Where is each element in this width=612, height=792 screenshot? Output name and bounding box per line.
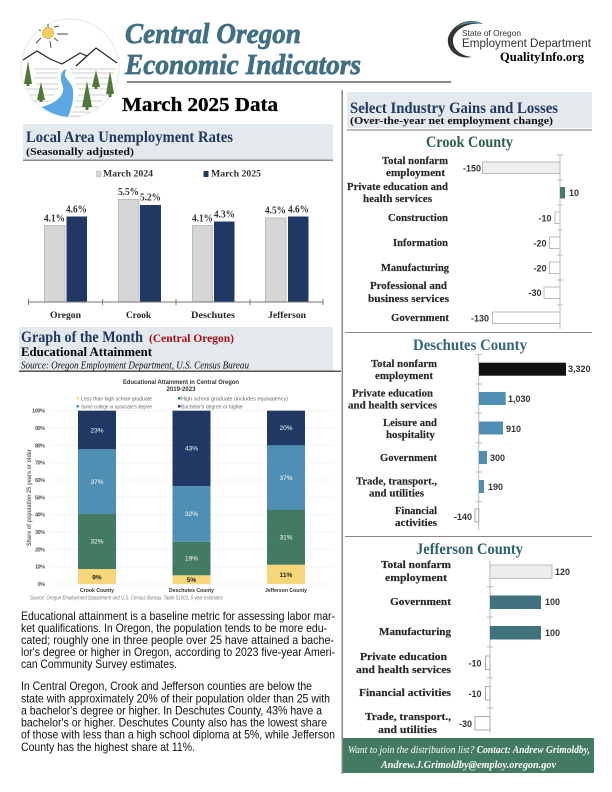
panel: Jefferson County bbox=[356, 541, 570, 736]
Jefferson County bar chart: Manufacturing bbox=[379, 627, 452, 638]
unemployment legend: March 2025 bbox=[211, 170, 261, 180]
chart title bbox=[123, 380, 239, 393]
panel: Crook County bbox=[347, 134, 579, 329]
text block: second paragraph: bachelor's or higher. Deschutes County also has the lowest share bbox=[21, 716, 327, 730]
Deschutes County bar chart: 3,320 bbox=[568, 364, 591, 374]
callout: distribution list contact: Andrew.J.Grimoldby@employ.oregon.gov bbox=[380, 760, 556, 771]
Crook County bar chart: Private education and bbox=[347, 182, 448, 193]
text block: second paragraph: a bachelor's degree or higher. In Deschutes County, 43% have a bbox=[21, 704, 322, 718]
panel: select industry heading bbox=[347, 92, 592, 130]
category labels: Jefferson County bbox=[265, 588, 308, 594]
logo: State of Oregon Employment Department bbox=[448, 21, 592, 64]
Jefferson County heading: Jefferson County bbox=[416, 541, 523, 558]
panel: select industry heading: Select Industry Gains and Losses bbox=[350, 100, 558, 117]
date heading: March 2025 Data bbox=[122, 94, 278, 116]
bar chart: unemployment rates: Jefferson bbox=[268, 311, 307, 321]
Deschutes County bar chart: and utilities bbox=[369, 488, 424, 500]
Deschutes County bar chart: Private education bbox=[352, 388, 433, 400]
bar chart: unemployment rates: 4.6% bbox=[288, 204, 309, 216]
Crook County bar chart: Government bbox=[391, 313, 450, 324]
bars: Crook County bbox=[78, 411, 116, 584]
category labels: Crook County bbox=[80, 588, 115, 594]
bars: Jefferson County bbox=[267, 411, 305, 584]
Crook County bar chart: -20 bbox=[533, 264, 546, 274]
title: Economic Indicators bbox=[124, 50, 361, 81]
Jefferson County bar chart bbox=[356, 560, 570, 736]
text block: first paragraph: can Community Survey estimates. bbox=[21, 657, 177, 671]
graph of the month heading: Source: Oregon Employment Department, U.S. Census Bureau bbox=[21, 360, 249, 372]
chart legend: High school graduate (includes equivalency) bbox=[181, 396, 288, 402]
Crook County bar chart: Professional and bbox=[370, 281, 447, 292]
Crook County bar chart: employment bbox=[386, 168, 446, 179]
bar chart: unemployment rates: 4.5% bbox=[265, 204, 286, 216]
panel: Deschutes County bbox=[348, 337, 591, 530]
y axis labels: 60% bbox=[35, 478, 45, 484]
text block: first paragraph: lor's degree or higher in Oregon, according to 2023 five-year Ameri- bbox=[21, 645, 335, 659]
Deschutes County bar chart: Government bbox=[380, 453, 437, 464]
bar chart: unemployment rates: Oregon bbox=[50, 311, 82, 321]
y axis labels: 40% bbox=[35, 513, 45, 519]
graph of the month heading bbox=[19, 327, 341, 372]
y axis labels: 90% bbox=[35, 426, 45, 432]
logo: Central Oregon landscape bbox=[21, 19, 119, 117]
bar chart: unemployment rates bbox=[28, 186, 323, 321]
Crook County bar chart: Construction bbox=[388, 213, 448, 224]
Crook County bar chart: Information bbox=[393, 238, 448, 249]
Crook County bar chart: business services bbox=[368, 294, 449, 305]
Jefferson County bar chart: and health services bbox=[356, 665, 451, 676]
Deschutes County bar chart: -140 bbox=[454, 512, 472, 522]
text block: second paragraph: In Central Oregon, Crook and Jefferson counties are below the bbox=[21, 679, 312, 693]
unemployment legend: March 2024 bbox=[103, 170, 153, 180]
y axis labels: 80% bbox=[35, 443, 45, 449]
bars: Deschutes County: 32% bbox=[185, 511, 198, 518]
Crook County bar chart: -20 bbox=[533, 238, 546, 248]
Deschutes County bar chart: activities bbox=[395, 518, 437, 529]
unemployment legend bbox=[96, 170, 261, 180]
text block: second paragraph: of those with less than a high school diploma at 5%, while Jefferson bbox=[21, 728, 335, 742]
bar chart: unemployment rates: Crook bbox=[126, 311, 152, 321]
Crook County bar chart: -130 bbox=[471, 314, 489, 324]
bars: Deschutes County: 5% bbox=[187, 577, 196, 584]
bars: Deschutes County: 43% bbox=[185, 446, 198, 453]
Deschutes County bar chart: Financial bbox=[395, 506, 437, 517]
bars: Jefferson County: 31% bbox=[279, 534, 293, 542]
column divider bbox=[342, 90, 343, 774]
chart title: 2019-2023 bbox=[166, 387, 196, 393]
y axis labels: Share of population 25 years or older bbox=[27, 448, 33, 546]
Jefferson County bar chart: Government bbox=[390, 597, 452, 608]
bar chart: unemployment rates: 4.1% bbox=[192, 212, 213, 224]
Crook County bar chart bbox=[347, 154, 579, 329]
bars: Crook County: 37% bbox=[90, 479, 104, 486]
Deschutes County bar chart: employment bbox=[375, 371, 434, 382]
panel: graph of the month bbox=[19, 327, 341, 754]
Crook County bar chart: -10 bbox=[538, 214, 552, 224]
text block: second paragraph: County has the highest share at 11%. bbox=[21, 740, 195, 754]
Deschutes County bar chart: 300 bbox=[490, 453, 505, 463]
y axis labels: 70% bbox=[35, 461, 45, 467]
unemployment heading: (Seasonally adjusted) bbox=[26, 146, 134, 158]
text block: second paragraph bbox=[21, 679, 335, 754]
category labels bbox=[80, 588, 308, 594]
bars: Crook County: 32% bbox=[90, 539, 104, 546]
logo: State of Oregon Employment Department: Employment Department bbox=[462, 38, 592, 50]
Deschutes County bar chart: 190 bbox=[488, 482, 503, 492]
Deschutes County bar chart: 1,030 bbox=[508, 394, 531, 404]
panel: local area unemployment rates bbox=[23, 124, 333, 321]
Crook County bar chart: Total nonfarm bbox=[382, 156, 448, 167]
Jefferson County bar chart: Financial activities bbox=[359, 688, 451, 699]
bar chart: unemployment rates: 4.3% bbox=[214, 208, 235, 220]
callout: distribution list contact: Want to join the distribution list? Contact: Andrew Grimoldby, bbox=[348, 745, 590, 756]
Deschutes County bar chart: Leisure and bbox=[383, 418, 437, 429]
y axis labels: 10% bbox=[35, 565, 45, 571]
chart source: Source: Oregon Employment Department and U.S. Census Bureau, Table S1501, 5 year estimates bbox=[30, 596, 223, 602]
Crook County bar chart: 10 bbox=[569, 188, 579, 198]
bars: Jefferson County: 37% bbox=[279, 475, 293, 482]
text block: first paragraph: cated; roughly one in three people over 25 have attained a bache- bbox=[21, 633, 334, 647]
Jefferson County bar chart: 120 bbox=[555, 567, 570, 577]
Jefferson County bar chart: 100 bbox=[545, 597, 560, 607]
unemployment heading bbox=[23, 124, 333, 161]
Jefferson County bar chart: Trade, transport., bbox=[365, 712, 451, 723]
chart title: Educational Attainment in Central Oregon bbox=[123, 380, 239, 386]
category labels: Deschutes County bbox=[169, 588, 215, 594]
y axis labels: 50% bbox=[35, 495, 45, 501]
bars: Crook County: 9% bbox=[92, 574, 102, 582]
Jefferson County bar chart: -10 bbox=[468, 658, 482, 668]
panel: select industry heading: (Over-the-year net employment change) bbox=[350, 115, 553, 127]
y axis labels bbox=[27, 409, 45, 588]
y axis labels: 100% bbox=[32, 409, 45, 415]
Crook County bar chart: -30 bbox=[528, 288, 542, 298]
bars: Deschutes County: 19% bbox=[185, 556, 198, 563]
chart legend bbox=[76, 396, 288, 410]
callout: distribution list contact bbox=[343, 738, 594, 773]
text block: second paragraph: state with approximately 20% of their population older than 25 with bbox=[21, 692, 330, 706]
Jefferson County bar chart: Total nonfarm bbox=[381, 560, 451, 571]
bar chart: unemployment rates: 4.6% bbox=[66, 204, 87, 216]
unemployment heading: Local Area Unemployment Rates bbox=[26, 129, 233, 146]
Jefferson County bar chart: Private education bbox=[360, 652, 447, 663]
title bbox=[124, 19, 451, 83]
y axis labels: 20% bbox=[35, 547, 45, 553]
logo: State of Oregon Employment Department: QualityInfo.org bbox=[500, 50, 585, 64]
graph of the month heading: (Central Oregon) bbox=[149, 331, 234, 345]
bar chart: unemployment rates: 5.5% bbox=[118, 186, 139, 198]
Deschutes County bar chart bbox=[348, 354, 591, 530]
text block: first paragraph: ket qualifications. In Oregon, the population tends to be more edu- bbox=[21, 621, 327, 635]
y axis labels: 0% bbox=[38, 582, 45, 588]
Jefferson County bar chart: and utilities bbox=[378, 725, 437, 736]
bar chart: unemployment rates: 4.1% bbox=[44, 212, 65, 224]
text block: first paragraph: Educational attainment is a baseline metric for assessing labor mar- bbox=[21, 609, 335, 623]
logo: State of Oregon Employment Department: State of Oregon bbox=[462, 28, 521, 38]
Crook County bar chart: -150 bbox=[463, 164, 481, 174]
Crook County heading: Crook County bbox=[426, 134, 513, 151]
y axis labels: 30% bbox=[35, 530, 45, 536]
Deschutes County heading: Deschutes County bbox=[413, 337, 527, 354]
Jefferson County bar chart: -30 bbox=[459, 719, 472, 729]
chart legend: Some college or associate's degree bbox=[81, 404, 152, 410]
bars: Jefferson County: 11% bbox=[280, 572, 293, 579]
Deschutes County bar chart: Total nonfarm bbox=[371, 359, 437, 370]
text block: first paragraph bbox=[21, 609, 335, 671]
Jefferson County bar chart: employment bbox=[385, 573, 448, 584]
Crook County bar chart: Manufacturing bbox=[381, 263, 450, 274]
bars: Jefferson County: 20% bbox=[279, 425, 293, 432]
Jefferson County bar chart: -10 bbox=[468, 689, 482, 699]
Deschutes County bar chart: and health services bbox=[348, 400, 437, 412]
Deschutes County bar chart: hospitality bbox=[386, 430, 436, 441]
stacked bar chart: educational attainment bbox=[27, 380, 334, 602]
graph of the month heading: Educational Attainment bbox=[21, 345, 153, 359]
Deschutes County bar chart: Trade, transport., bbox=[356, 476, 437, 488]
chart legend: Bachelor's degree or higher bbox=[181, 404, 243, 410]
Crook County bar chart: health services bbox=[363, 194, 432, 205]
bar chart: unemployment rates: 5.2% bbox=[140, 192, 161, 204]
bars: Deschutes County bbox=[172, 411, 210, 584]
Jefferson County bar chart: 100 bbox=[545, 628, 560, 638]
graph of the month heading: Graph of the Month bbox=[21, 329, 143, 346]
bar chart: unemployment rates: Deschutes bbox=[191, 311, 235, 321]
chart legend: Less than high school graduate bbox=[81, 396, 152, 402]
title: Central Oregon bbox=[125, 19, 301, 50]
Deschutes County bar chart: 910 bbox=[506, 424, 521, 434]
bars: Crook County: 23% bbox=[90, 428, 104, 434]
